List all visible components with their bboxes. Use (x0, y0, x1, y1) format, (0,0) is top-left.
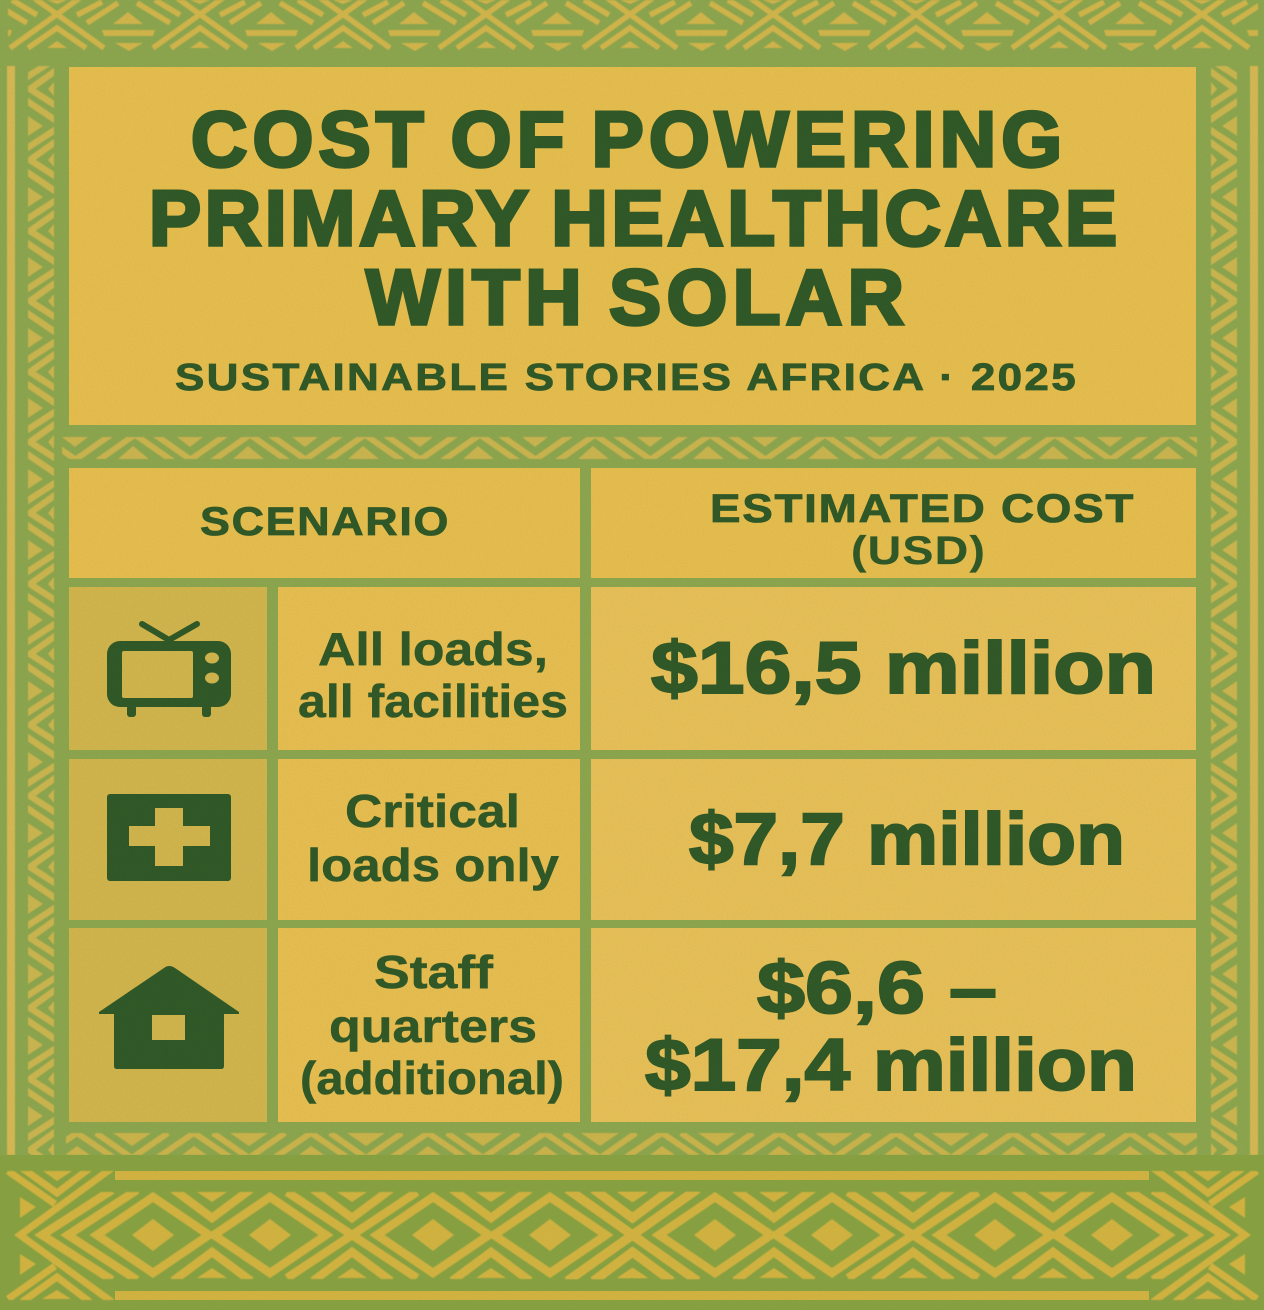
middle divider pattern (62, 436, 1198, 460)
header: scenario: SCENARIO (200, 500, 450, 544)
title: WITH SOLAR (366, 253, 904, 341)
label: All loads, (318, 623, 548, 675)
label: (additional) (300, 1052, 564, 1104)
value: $7,7 million (689, 799, 1125, 880)
label: quarters (329, 1000, 537, 1052)
bottom border pattern (0, 1155, 1264, 1310)
header: estimated cost: (USD) (851, 529, 986, 573)
title panel (69, 67, 1196, 425)
value: $16,5 million (651, 628, 1156, 709)
value (645, 948, 1137, 1106)
icon: television (107, 624, 231, 717)
label (298, 623, 568, 727)
right border pattern (1207, 45, 1258, 1183)
header: estimated cost (591, 468, 1196, 578)
title: PRIMARY HEALTHCARE (149, 174, 1117, 262)
title: COST OF POWERING (191, 95, 1062, 183)
row 2: critical loads (69, 759, 1196, 920)
title (149, 95, 1117, 341)
label (300, 946, 564, 1104)
row 3: staff quarters (69, 928, 1196, 1122)
lower divider pattern (66, 1132, 1198, 1155)
subtitle: SUSTAINABLE STORIES AFRICA · 2025 (175, 357, 1078, 399)
row 1: all loads (69, 587, 1196, 750)
left border pattern (7, 45, 58, 1183)
table (69, 468, 1196, 1122)
value: $17,4 million (645, 1025, 1137, 1106)
label: all facilities (298, 675, 568, 727)
label (307, 785, 559, 891)
label: loads only (307, 839, 559, 891)
header: estimated cost: ESTIMATED COST (710, 487, 1135, 531)
icon: house (99, 966, 239, 1069)
icon: medical cross (107, 794, 231, 881)
label: Critical (345, 785, 520, 837)
label: Staff (374, 946, 494, 998)
header: scenario (69, 468, 580, 578)
value: $6,6 – (757, 948, 997, 1029)
top border pattern (0, 0, 1264, 51)
